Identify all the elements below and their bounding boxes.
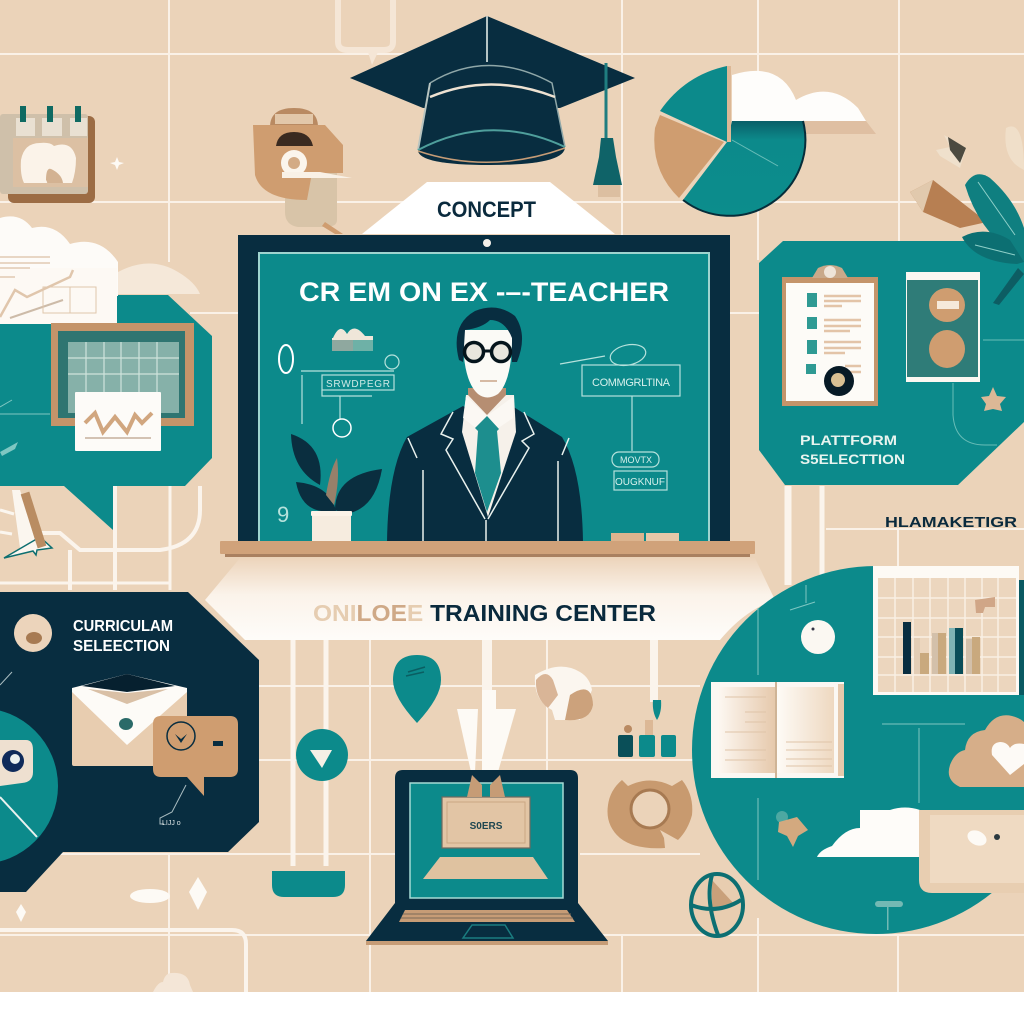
- desk: [220, 541, 755, 557]
- label: marketing heading: HLAMAKETIGR: [885, 514, 1017, 531]
- small stand: [875, 901, 903, 930]
- diagram: right labels: COMMGRLTINA: [592, 377, 671, 389]
- icon: open book: [711, 682, 844, 778]
- diagram: right labels: [560, 341, 680, 490]
- panel heading: PLATTFORM: [800, 432, 897, 448]
- concept banner: [362, 182, 615, 234]
- monitor with presenter: [238, 235, 730, 542]
- icon: books: [611, 533, 679, 542]
- laptop with screen: [366, 770, 608, 945]
- diagram: right labels: MOVTX: [620, 455, 652, 465]
- icon: pie chart with cloud: [654, 66, 876, 216]
- chart card: [0, 257, 117, 324]
- grainy cloud: [118, 264, 200, 294]
- icon: eye badge: [14, 614, 52, 652]
- panel: platform selection: S5ELECTTION: [800, 451, 905, 467]
- icon: small board: [332, 328, 373, 351]
- icon: speech bubble: [153, 716, 238, 796]
- icon: heart cloud: [949, 715, 1024, 787]
- icon: cloud: [817, 808, 920, 857]
- icon: ivory shell: [535, 667, 593, 720]
- icon: spotlight beams: [457, 690, 516, 795]
- icon: potted plant: [291, 434, 382, 542]
- icon: leaves and pencil: [910, 126, 1024, 305]
- icon: dial: [801, 620, 835, 654]
- online training center banner: [205, 558, 775, 640]
- panel: curriculum selection: SELEECTION: [73, 638, 170, 655]
- icon: certificate card: [906, 272, 980, 382]
- icon: bottom blob: [153, 973, 193, 992]
- icon: envelope: [72, 674, 187, 766]
- icon: round arrow button: [296, 729, 348, 781]
- panel: platform selection: [759, 241, 1024, 485]
- icon: graduation cap: [350, 16, 635, 197]
- icon: sketch tools: [0, 490, 52, 558]
- icon: screen sign: [442, 797, 530, 848]
- presenter: [387, 307, 583, 542]
- icon: calendar: [0, 106, 95, 203]
- cloud: [0, 216, 118, 296]
- small caption: LIJJ o: [162, 820, 181, 827]
- panel heading: CURRICULAM: [73, 618, 173, 635]
- icon: top hanging tag: [338, 0, 393, 65]
- diagram: left labels: SRWDPEGR: [326, 379, 390, 390]
- diagram: left labels: 9: [277, 502, 289, 527]
- icon: pill bar: [272, 871, 345, 897]
- bar chart: [873, 566, 1024, 695]
- chart note: [75, 392, 161, 451]
- icon: tan ring: [608, 780, 692, 848]
- icon: map pin: [393, 655, 441, 723]
- icon: teal wheel: [691, 874, 743, 936]
- icon: star: [981, 387, 1006, 411]
- panel: analytics bubble: [0, 216, 212, 530]
- icon: beaker set: [618, 700, 676, 757]
- icon: screen sign: S0ERS: [470, 821, 503, 832]
- panel: curriculum selection: [0, 592, 259, 892]
- icon: clipboard: [782, 265, 878, 406]
- icon: camera disc: [0, 708, 58, 864]
- diagram: right labels: OUGKNUF: [615, 477, 665, 488]
- keyboard: [399, 910, 575, 938]
- icon: sparkle star: [776, 811, 808, 847]
- diagram: left labels: [277, 345, 399, 527]
- icon: tablet: [919, 810, 1024, 893]
- main title: CR EM ON EX -–-TEACHER: [299, 277, 669, 307]
- concept banner: CONCEPT: [437, 197, 537, 222]
- icon: padlock bag: [253, 108, 352, 234]
- chalkboard: [51, 323, 194, 426]
- online training center banner: ONILOEE TRAINING CENTER: [313, 600, 656, 626]
- icon: small sparkles: [16, 157, 207, 922]
- panel: resources circle: [689, 566, 1024, 934]
